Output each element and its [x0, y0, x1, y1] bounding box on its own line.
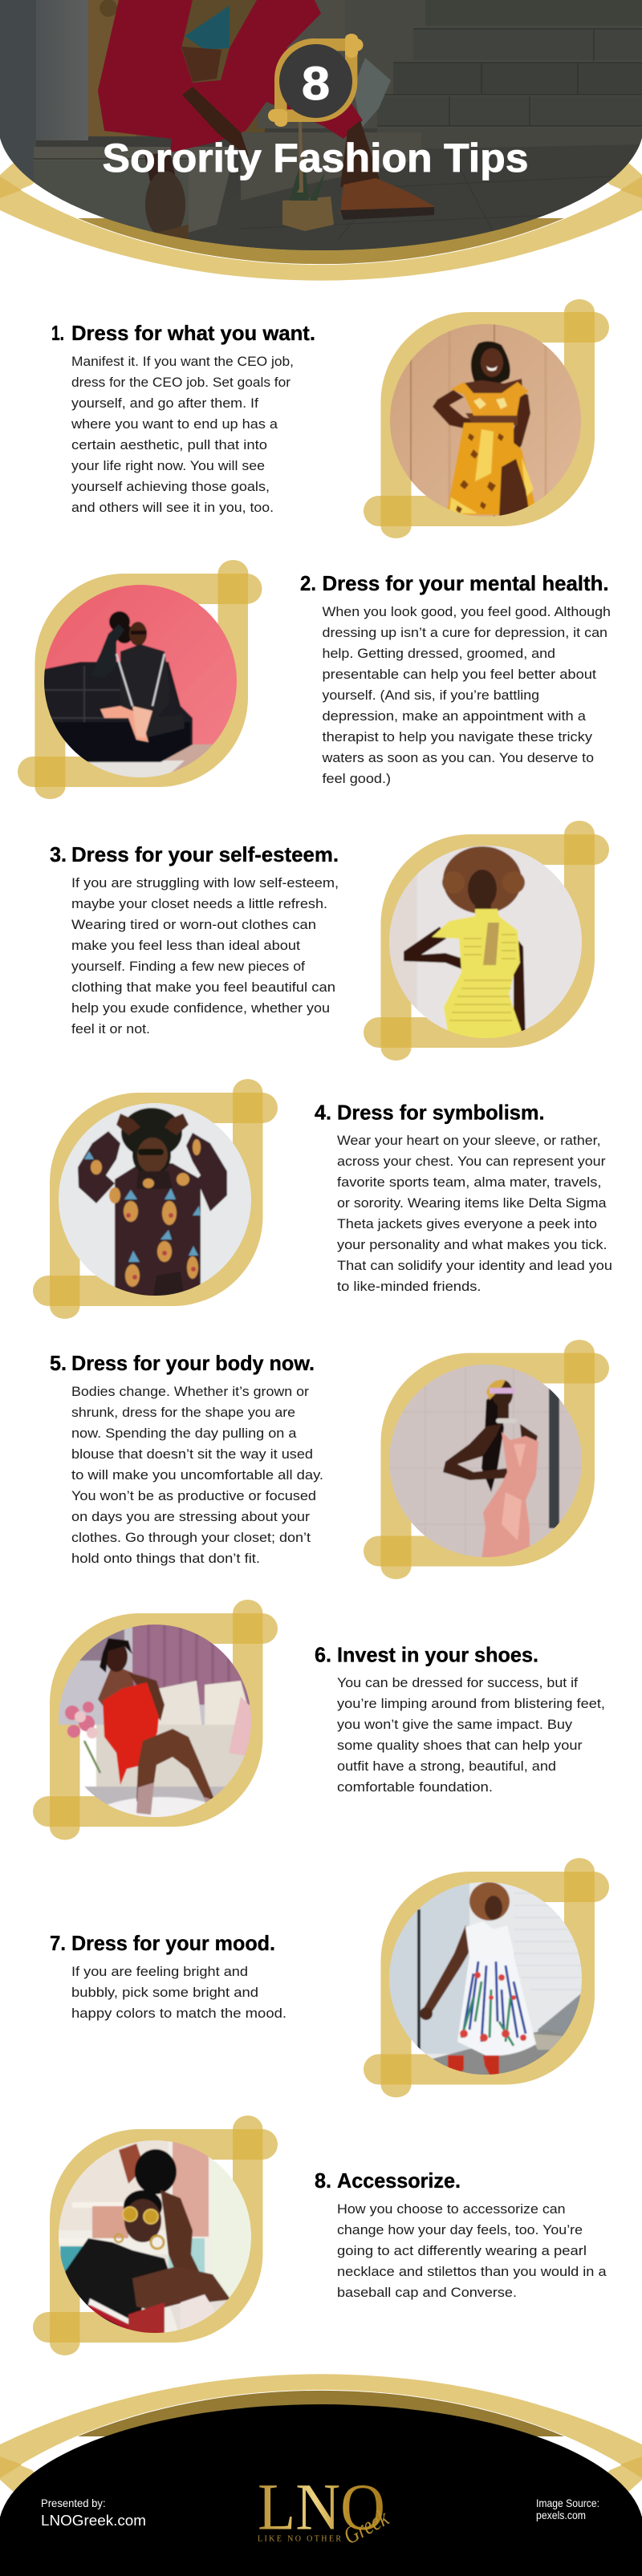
- frame and photo: tip 7: [364, 1858, 609, 2097]
- text: tip 6: outfit have a strong, beautiful, and: [337, 1759, 556, 1774]
- text: tip 7: If you are feeling bright and: [71, 1964, 248, 1979]
- text: tip 1: and others will see it in you, too.: [71, 500, 274, 515]
- logo: LNO Like No Other Greek: LIKE NO OTHER: [258, 2535, 341, 2544]
- text: tip 3: make you feel less than ideal about: [71, 938, 300, 953]
- header photo: woman in red suit on steps: [0, 0, 642, 257]
- text: tip 5: [71, 1384, 323, 1566]
- text: tip 8: change how your day feels, too. You’re: [337, 2222, 583, 2237]
- text: tip 3: Wearing tired or worn-out clothes can: [71, 917, 316, 932]
- heading: tip 2: Dress for your mental health.: [323, 571, 608, 595]
- text: tip 4: Wear your heart on your sleeve, or rather,: [337, 1133, 600, 1148]
- panel: tip 8: [33, 2116, 607, 2355]
- text: tip 5: to will make you uncomfortable all day.: [71, 1467, 323, 1483]
- header gold rings: [0, 160, 642, 281]
- panel: tip 2: [18, 560, 611, 799]
- text: tip 6: comfortable foundation.: [337, 1779, 493, 1795]
- text: tip 2: depression, make an appointment with a: [323, 708, 587, 724]
- text: tip 3: feel it or not.: [71, 1021, 150, 1036]
- text: tip 5: on days you are stressing about your: [71, 1509, 310, 1524]
- heading: tip 3: 3.: [50, 842, 67, 866]
- text: tip 1: yourself achieving those goals,: [71, 479, 270, 494]
- text: tip 1: your life right now. You will see: [71, 458, 265, 473]
- text: tip 7: [71, 1964, 286, 2021]
- footer text: image source: Image Source:: [536, 2497, 599, 2509]
- frame and photo: tip 4: [33, 1079, 278, 1319]
- text: tip 8: necklace and stilettos than you would in a: [337, 2264, 607, 2279]
- frame and photo: tip 5: [364, 1340, 609, 1579]
- text: tip 6: You can be dressed for success, but if: [337, 1675, 578, 1690]
- title: Sorority Fashion Tips: [103, 136, 528, 181]
- frame and photo: tip 1: [364, 299, 609, 538]
- text: tip 5: hold onto things that don’t fit.: [71, 1551, 260, 1566]
- heading: tip 7: 7.: [50, 1931, 66, 1955]
- footer gold rings: [0, 2374, 642, 2494]
- frame and photo: tip 3: [364, 821, 609, 1061]
- text: tip 1: certain aesthetic, pull that into: [71, 437, 267, 452]
- text: tip 5: blouse that doesn’t sit the way it used: [71, 1446, 313, 1462]
- text: tip 5: now. Spending the day pulling on a: [71, 1426, 297, 1441]
- footer text: image source: pexels.com: [536, 2509, 586, 2521]
- text: tip 1: [71, 354, 294, 515]
- text: tip 6: some quality shoes that can help your: [337, 1738, 583, 1753]
- text: tip 2: dressing up isn’t a cure for depression, it can: [323, 625, 607, 640]
- text: tip 4: across your chest. You can represent your: [337, 1154, 606, 1169]
- heading: tip 5: 5.: [50, 1351, 67, 1375]
- text: tip 5: clothes. Go through your closet; don’t: [71, 1530, 311, 1545]
- text: tip 1: dress for the CEO job. Set goals for: [71, 375, 291, 390]
- panel: tip 7: [50, 1858, 609, 2097]
- heading: tip 4: Dress for symbolism.: [337, 1101, 545, 1125]
- text: tip 5: Bodies change. Whether it’s grown or: [71, 1384, 309, 1399]
- footer text: presented by: [41, 2497, 146, 2529]
- heading: tip 3: Dress for your self-esteem.: [71, 842, 339, 866]
- text: tip 1: Manifest it. If you want the CEO job,: [71, 354, 294, 369]
- text: tip 8: baseball cap and Converse.: [337, 2285, 517, 2300]
- heading: tip 1: 1.: [51, 321, 64, 345]
- text: tip 2: When you look good, you feel good. Although: [323, 604, 611, 619]
- frame and photo: tip 8: [33, 2116, 278, 2355]
- text: tip 4: Theta jackets gives everyone a peek into: [337, 1216, 597, 1231]
- text: tip 3: maybe your closet needs a little refresh.: [71, 896, 327, 911]
- panel: tip 6: [33, 1600, 605, 1840]
- text: tip 1: yourself, and go after them. If: [71, 396, 258, 411]
- text: tip 7: bubbly, pick some bright and: [71, 1985, 258, 2000]
- text: tip 5: You won’t be as productive or focused: [71, 1488, 316, 1503]
- text: tip 2: feel good.): [323, 771, 391, 786]
- footer text: image source: [536, 2497, 599, 2521]
- frame and photo: tip 2: [18, 560, 262, 799]
- heading: tip 2: 2.: [300, 571, 316, 595]
- heading: tip 6: 6.: [315, 1642, 331, 1666]
- heading: tip 8: Accessorize.: [337, 2168, 461, 2193]
- text: tip 2: waters as soon as you can. You deserve to: [321, 750, 594, 765]
- text: tip 3: If you are struggling with low self-esteem,: [71, 875, 339, 890]
- text: tip 6: [337, 1675, 605, 1795]
- text: tip 2: therapist to help you navigate these tricky: [323, 729, 593, 744]
- text: tip 4: [337, 1133, 612, 1294]
- text: tip 2: [321, 604, 611, 786]
- logo: LNO Like No Other Greek: LNO: [258, 2470, 385, 2544]
- text: tip 4: to like-minded friends.: [337, 1279, 482, 1294]
- text: tip 2: yourself. (And sis, if you’re battling: [323, 688, 539, 703]
- text: tip 3: help you exude confidence, whether you: [71, 1000, 330, 1016]
- heading: tip 4: 4.: [315, 1101, 331, 1125]
- heading: tip 1: Dress for what you want.: [71, 321, 315, 345]
- logo: LNO Like No Other Greek: Greek: [339, 2505, 393, 2550]
- text: tip 4: or sorority. Wearing items like Delta Sigma: [337, 1195, 607, 1211]
- text: tip 3: clothing that make you feel beautiful can: [71, 980, 335, 995]
- frame and photo: tip 6: [33, 1600, 278, 1840]
- text: tip 2: presentable can help you feel better about: [323, 667, 596, 682]
- heading: tip 7: Dress for your mood.: [71, 1931, 275, 1955]
- badge: number 8: [268, 34, 363, 127]
- text: tip 1: where you want to end up has a: [71, 416, 278, 432]
- text: tip 5: shrunk, dress for the shape you are: [71, 1405, 295, 1420]
- text: tip 6: you’re limping around from blistering feet,: [337, 1696, 605, 1711]
- text: tip 7: happy colors to match the mood.: [71, 2006, 286, 2021]
- text: tip 6: you won’t give the same impact. Buy: [337, 1717, 573, 1732]
- heading: tip 8: 8.: [315, 2168, 331, 2193]
- text: tip 8: [337, 2201, 607, 2300]
- text: tip 3: yourself. Finding a few new pieces of: [71, 959, 305, 974]
- text: tip 4: favorite sports team, alma mater, travels,: [337, 1174, 602, 1190]
- heading: tip 5: Dress for your body now.: [71, 1351, 315, 1375]
- panel: tip 3: [50, 821, 609, 1061]
- footer black panel: [0, 2404, 642, 2576]
- panel: tip 1: [51, 299, 609, 538]
- footer text: presented by: Presented by:: [41, 2497, 106, 2509]
- panel: tip 5: [50, 1340, 609, 1579]
- text: tip 8: going to act differently wearing a pearl: [337, 2243, 587, 2258]
- panel: tip 4: [33, 1079, 612, 1319]
- text: tip 4: your personality and what makes you tick.: [337, 1237, 607, 1252]
- text: tip 3: [71, 875, 339, 1036]
- heading: tip 6: Invest in your shoes.: [337, 1642, 538, 1666]
- text: tip 8: How you choose to accessorize can: [337, 2201, 566, 2217]
- text: tip 2: help. Getting dressed, groomed, and: [323, 646, 555, 661]
- text: tip 4: That can solidify your identity and lead you: [337, 1258, 612, 1273]
- badge: number 8: 8: [302, 58, 330, 110]
- footer text: presented by: LNOGreek.com: [41, 2513, 146, 2529]
